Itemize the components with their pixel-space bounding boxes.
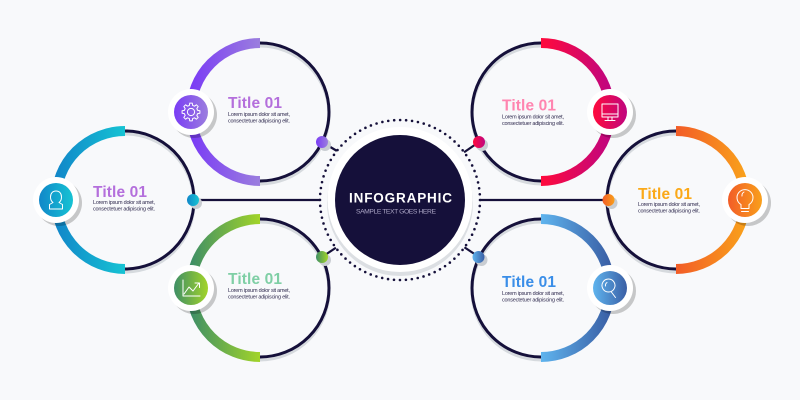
panel: cyan person (33, 131, 202, 272)
pink body text: Lorem ipsum dolor sit amet, (502, 114, 564, 120)
cyan arc band (56, 131, 125, 269)
blue junction dot (472, 251, 488, 266)
panel: orange lightbulb (602, 131, 771, 272)
orange junction dot (602, 194, 618, 209)
orange title: Title 01 (638, 186, 692, 203)
cyan junction dot (187, 194, 202, 209)
orange body text (638, 202, 700, 214)
icon: line chart (168, 265, 217, 314)
central hub (320, 120, 480, 280)
icon: gear (168, 89, 217, 138)
blue body text: Lorem ipsum dolor sit amet, (502, 291, 564, 297)
cyan body text (93, 200, 155, 212)
panel: pink monitor (472, 43, 636, 184)
icon: person (33, 177, 82, 226)
purple arc band (191, 43, 260, 181)
hub heading: INFOGRAPHIC (349, 190, 452, 206)
blue title: Title 01 (502, 274, 556, 291)
cyan body text: Lorem ipsum dolor sit amet, (93, 200, 155, 206)
connector lines (193, 142, 608, 257)
orange body text: consectetuer adipiscing elit. (638, 208, 700, 214)
icon: monitor (587, 89, 636, 138)
orange arc band (676, 131, 745, 269)
blue arc band (541, 219, 610, 357)
purple title: Title 01 (228, 95, 282, 112)
green title: Title 01 (228, 271, 282, 288)
purple body text (228, 112, 290, 124)
panel: purple gear (168, 43, 331, 184)
purple junction dot (316, 136, 331, 151)
blue body text: consectetuer adipiscing elit. (502, 298, 564, 304)
blue body text (502, 291, 564, 304)
purple body text: Lorem ipsum dolor sit amet, (228, 112, 290, 118)
green junction dot (316, 251, 331, 266)
pink title: Title 01 (502, 98, 556, 114)
green body text (228, 288, 290, 300)
green arc band (191, 219, 260, 357)
icon: magnifier (587, 265, 636, 314)
cyan title: Title 01 (93, 184, 147, 201)
hub subtitle: SAMPLE TEXT GOES HERE (356, 208, 436, 216)
pink arc band (541, 43, 610, 181)
orange body text: Lorem ipsum dolor sit amet, (638, 202, 700, 208)
green body text: consectetuer adipiscing elit. (228, 294, 290, 300)
cyan body text: consectetuer adipiscing elit. (93, 206, 155, 212)
panel: blue search (472, 219, 636, 360)
purple body text: consectetuer adipiscing elit. (228, 118, 290, 124)
pink body text (502, 114, 564, 127)
pink body text: consectetuer adipiscing elit. (502, 121, 564, 127)
green body text: Lorem ipsum dolor sit amet, (228, 288, 290, 294)
panel: green chart (168, 219, 331, 360)
icon: lightbulb (722, 177, 771, 226)
pink junction dot (473, 136, 488, 151)
